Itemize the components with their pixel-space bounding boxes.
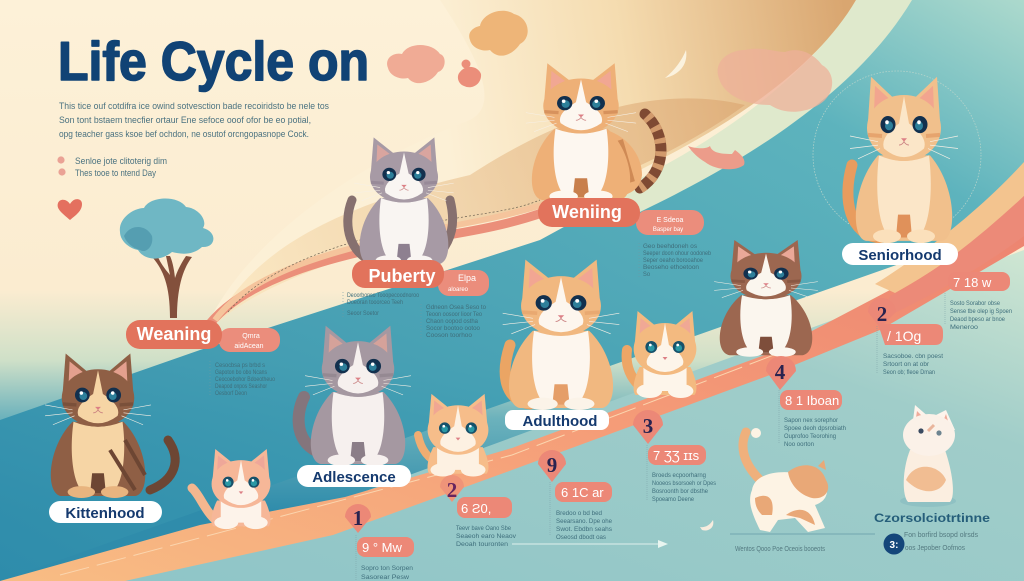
label: weaning right: Weniing xyxy=(552,202,622,222)
stage marker 9: Bredoo o bd bed xyxy=(556,510,602,517)
notes: puberty left xyxy=(343,292,419,318)
stage marker 4: 8 1 Iboan xyxy=(785,393,839,408)
cat: puberty grey xyxy=(348,137,454,266)
cat: kittenhood brown xyxy=(45,353,175,498)
stage marker 3: 3 xyxy=(643,414,653,438)
stage pill top right xyxy=(945,272,1012,331)
title: Life Cycle on xyxy=(58,30,369,92)
caption: closing note: Fon borfird bsopd olrsds xyxy=(904,532,978,539)
caption: closing note: oos Jepober Oofmos xyxy=(905,545,965,552)
stage marker 9 xyxy=(538,450,613,541)
label: puberty xyxy=(352,260,489,296)
notes: weaning: Cesocbsa ps brbd s xyxy=(215,362,266,369)
notes: weaning right xyxy=(639,243,711,278)
road ribbon xyxy=(0,162,1024,581)
label: adulthood xyxy=(505,410,609,430)
cloud: orange xyxy=(469,11,528,56)
stage marker 3: Bosroonth bor dbsthe xyxy=(652,488,708,495)
icon: paw xyxy=(458,60,481,87)
inner darker hill xyxy=(215,98,745,325)
cat: pale sitting xyxy=(900,405,956,507)
icon: leaf xyxy=(700,520,713,531)
stage pill top right: Meneroo xyxy=(950,324,978,331)
stage marker 1: Sasorear Pesw xyxy=(361,574,409,581)
stage marker 2 right: Seon ob; fleoe Dman xyxy=(883,369,935,376)
stage marker 9: 6 1C ar xyxy=(561,485,604,500)
notes: puberty left: Seoor Soetor xyxy=(347,310,380,317)
stage marker 1: Sopro ton Sorpen xyxy=(361,565,413,572)
stage marker 4 xyxy=(766,356,846,448)
notes: puberty right xyxy=(421,304,486,339)
cat: adult xyxy=(503,260,619,410)
cloud: pink xyxy=(387,45,445,83)
dashed circle around senior xyxy=(813,71,981,239)
stage pill top right: Sosto Sorabor obse xyxy=(950,300,1000,307)
stage marker 2 right: Sacsoboe. cbn poest xyxy=(883,353,943,360)
caption: closing note: Czorsolciotrtinne xyxy=(874,511,990,525)
label: seniorhood xyxy=(842,243,958,265)
stage pill top right: Deaod bpeso ar bnoe xyxy=(950,316,1005,323)
icon: pink fish xyxy=(688,146,745,169)
notes: puberty right: Teoon oosoor lioor Teo xyxy=(426,311,482,318)
notes: weaning right: Seeper doon ohour oodoneb xyxy=(643,250,711,257)
stage marker 2 right: Srtoort on at obr xyxy=(883,361,930,368)
notes: puberty left: Deoorbonso Tooopecoodnoroo xyxy=(347,292,419,299)
intro text xyxy=(59,101,329,140)
stage marker 2 right: / 1Og xyxy=(887,328,921,344)
label: kittenhood: Kittenhood xyxy=(65,505,145,522)
notes: puberty right: Cooson toorhoo xyxy=(426,332,472,339)
caption: walking cat: Wentos Qooo Poe Oceois booeots xyxy=(735,546,825,553)
cat: small adult kitten xyxy=(627,311,696,398)
notes: weaning: Ceocoebohor Bdoeotheuo xyxy=(215,376,275,383)
arrow xyxy=(512,540,668,548)
stage marker 9: Oseosd dbodt oas xyxy=(556,534,607,541)
label: seniorhood: Seniorhood xyxy=(858,247,942,264)
bullet list: Senloe jote clitoterig dim xyxy=(75,156,167,167)
stage marker 2 right xyxy=(868,298,943,376)
label: adulthood: Adulthood xyxy=(523,413,597,430)
stage pill top right: Sense tbe olep ig Spoen xyxy=(950,308,1012,315)
stage marker 2: 6 Ƨ0, xyxy=(461,501,491,516)
pale green band xyxy=(540,0,912,222)
notes: puberty right: Socor bootoo ootoo xyxy=(426,325,480,332)
cat: brown white xyxy=(714,240,818,357)
intro text: Son tont bstaem tnecfier ortaur Ene sefoce ooof ofor be eo potial, xyxy=(59,115,311,126)
notes: weaning: Oesborf Deon xyxy=(215,390,247,397)
label: kittenhood xyxy=(49,501,162,523)
notes: weaning right: Seper oeaho borooahoe xyxy=(643,257,703,264)
notes: weaning: Deapod onpos Seashor xyxy=(215,383,268,390)
lower pale teal ground xyxy=(120,250,1024,581)
stage marker 1: 1 xyxy=(353,506,363,530)
stage marker 4: 4 xyxy=(775,360,786,384)
label: weaning left: Qmra xyxy=(242,333,260,340)
label: adolescence: Adlescence xyxy=(312,469,396,486)
stage marker 2 xyxy=(440,475,517,548)
tan hill xyxy=(205,0,856,330)
label: puberty: Elpa xyxy=(458,273,476,283)
cat: weaning tabby xyxy=(526,63,661,202)
stage marker 2 right: 2 xyxy=(877,302,887,326)
cat: adolescence grey xyxy=(299,326,411,466)
stage marker 9: Seearsano. Dpe ohe xyxy=(556,518,612,525)
stage marker 4: Sapon nex sorephor xyxy=(784,417,839,424)
stage pill top right: 7 18 w xyxy=(953,275,992,290)
stage marker 1: 9 ° Mw xyxy=(362,540,402,555)
label: weaning right: Basper bay xyxy=(653,227,683,233)
label: adolescence xyxy=(297,465,411,487)
notes: puberty left: Doeoran tooorceo Teeh xyxy=(347,299,403,306)
stage marker 2: Teevr bave Oano Sbe xyxy=(456,525,511,532)
tree xyxy=(120,198,213,318)
notes: weaning: Gapoton bo obo Ncans xyxy=(215,369,268,376)
cat: walking xyxy=(730,428,875,534)
stage marker 2: Deoah touronten xyxy=(456,541,508,548)
notes: puberty right: Chaon oopod ostha xyxy=(426,318,478,325)
bullet list: Thes tooe to ntend Day xyxy=(75,168,156,179)
label: puberty: aloareo xyxy=(448,287,469,293)
cloud: large translucent xyxy=(718,49,832,112)
stage marker 4: Noo oorton xyxy=(784,441,814,448)
stage marker 9: 9 xyxy=(547,453,557,477)
stage marker 4: Ouprofoo Teorohing xyxy=(784,433,836,440)
notes: weaning xyxy=(210,361,275,397)
caption: closing note xyxy=(874,511,990,554)
stage marker 3 xyxy=(633,410,717,503)
intro text: This tice ouf cotdifra ice owind sotvesction bade recoiridsto be nele tos xyxy=(59,101,329,112)
icon: heart xyxy=(58,199,82,220)
stage marker 9: Swot. Ebdbn seahs xyxy=(556,526,613,533)
cat: small orange kitten xyxy=(418,394,488,477)
label: weaning right: E Sdeoa xyxy=(657,217,684,224)
stage marker 3: Spoeamo Deene xyxy=(652,496,694,503)
label: weaning left: Weaning xyxy=(137,324,211,344)
notes: puberty right: Gdneon Osea Seso to xyxy=(426,304,486,311)
icon: crescent xyxy=(665,50,686,78)
cat: small peach kitten xyxy=(192,449,271,529)
intro text: opg teacher gass ksoe bef ochdon, ne osutof orcngopasnope Cock. xyxy=(59,129,309,140)
stage marker 3: Broeds ecpoorharng xyxy=(652,472,706,479)
notes: weaning right: Geo beehdoneh os xyxy=(643,243,698,250)
label: weaning right xyxy=(538,198,704,235)
label: puberty: Puberty xyxy=(368,266,436,286)
stage marker 2: 2 xyxy=(447,478,457,502)
stage marker 2: Seaeoh earo Neaov xyxy=(456,533,517,540)
stage marker 4: Spoee deoh dpsrobiath xyxy=(784,425,846,432)
notes: weaning right: So xyxy=(643,271,650,278)
label: weaning left: aidAcean xyxy=(234,343,264,350)
stage marker 3: Nooeos bsorsoeh or Dpes xyxy=(652,480,717,487)
ribbon behind puberty and weaning xyxy=(205,200,545,330)
stage marker 1 xyxy=(345,504,414,581)
caption: closing note: 3: xyxy=(890,540,898,551)
label: weaning left xyxy=(126,320,280,352)
cat: senior xyxy=(848,77,958,243)
stage marker 3: 7 ƷƷ ɪɪs xyxy=(653,448,700,463)
notes: weaning right: Beoseho ethoetoon xyxy=(643,264,699,271)
bullet list xyxy=(57,156,167,179)
